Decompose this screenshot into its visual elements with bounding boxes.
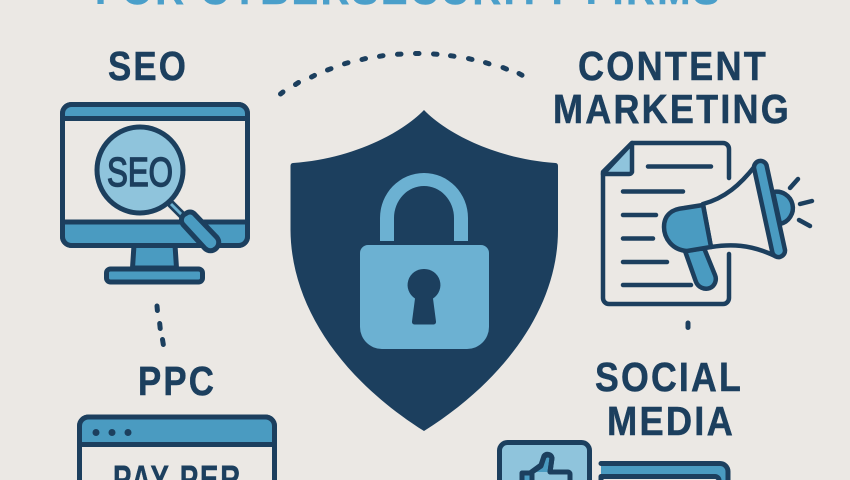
like box [500,442,590,480]
monitor bottom band [62,222,248,246]
heading: social media: SOCIAL [595,354,743,400]
heading: content marketing: CONTENT [578,43,768,89]
padlock shackle [380,173,468,241]
icon: PPC browser window [80,417,274,480]
icon: central shield with padlock [290,110,558,431]
megaphone speaker back [664,205,711,251]
magnifier neck [171,204,183,216]
megaphone sound bump [773,192,793,224]
magnifier handle [181,212,219,251]
browser dots [92,429,132,436]
browser frame [80,417,274,480]
padlock body [360,245,489,349]
shield [290,110,558,431]
document outline [603,143,729,304]
megaphone cone [703,166,775,256]
post card [601,464,728,480]
heading: PPC: PPC [138,358,216,404]
heading: social media: MEDIA [607,398,735,444]
heading: content marketing [553,43,791,132]
magnifier lens [97,127,183,213]
monitor frame [62,104,248,246]
document fold [603,143,632,174]
icon: document with megaphone [603,143,812,304]
heading: SEO: SEO [108,43,188,89]
sound rays [790,179,812,226]
dotted connector: SEO to PPC [157,306,163,344]
post card inner [601,476,719,480]
dotted connector: content to social [686,323,690,328]
monitor base [106,269,202,282]
monitor top bar [62,104,248,118]
icon: social media post [500,442,728,480]
monitor stand [132,245,176,268]
megaphone rim [754,161,785,257]
browser title bar [80,417,274,444]
heading: content marketing: MARKETING [553,86,791,132]
icon: SEO monitor with magnifier [62,104,248,282]
keyhole [408,269,440,325]
heading: social media [595,354,743,444]
magnifier text: SEO [107,149,173,195]
dotted arc connector [280,54,522,94]
megaphone handle [685,248,716,289]
thumb up [522,454,569,480]
document text lines [623,166,711,285]
